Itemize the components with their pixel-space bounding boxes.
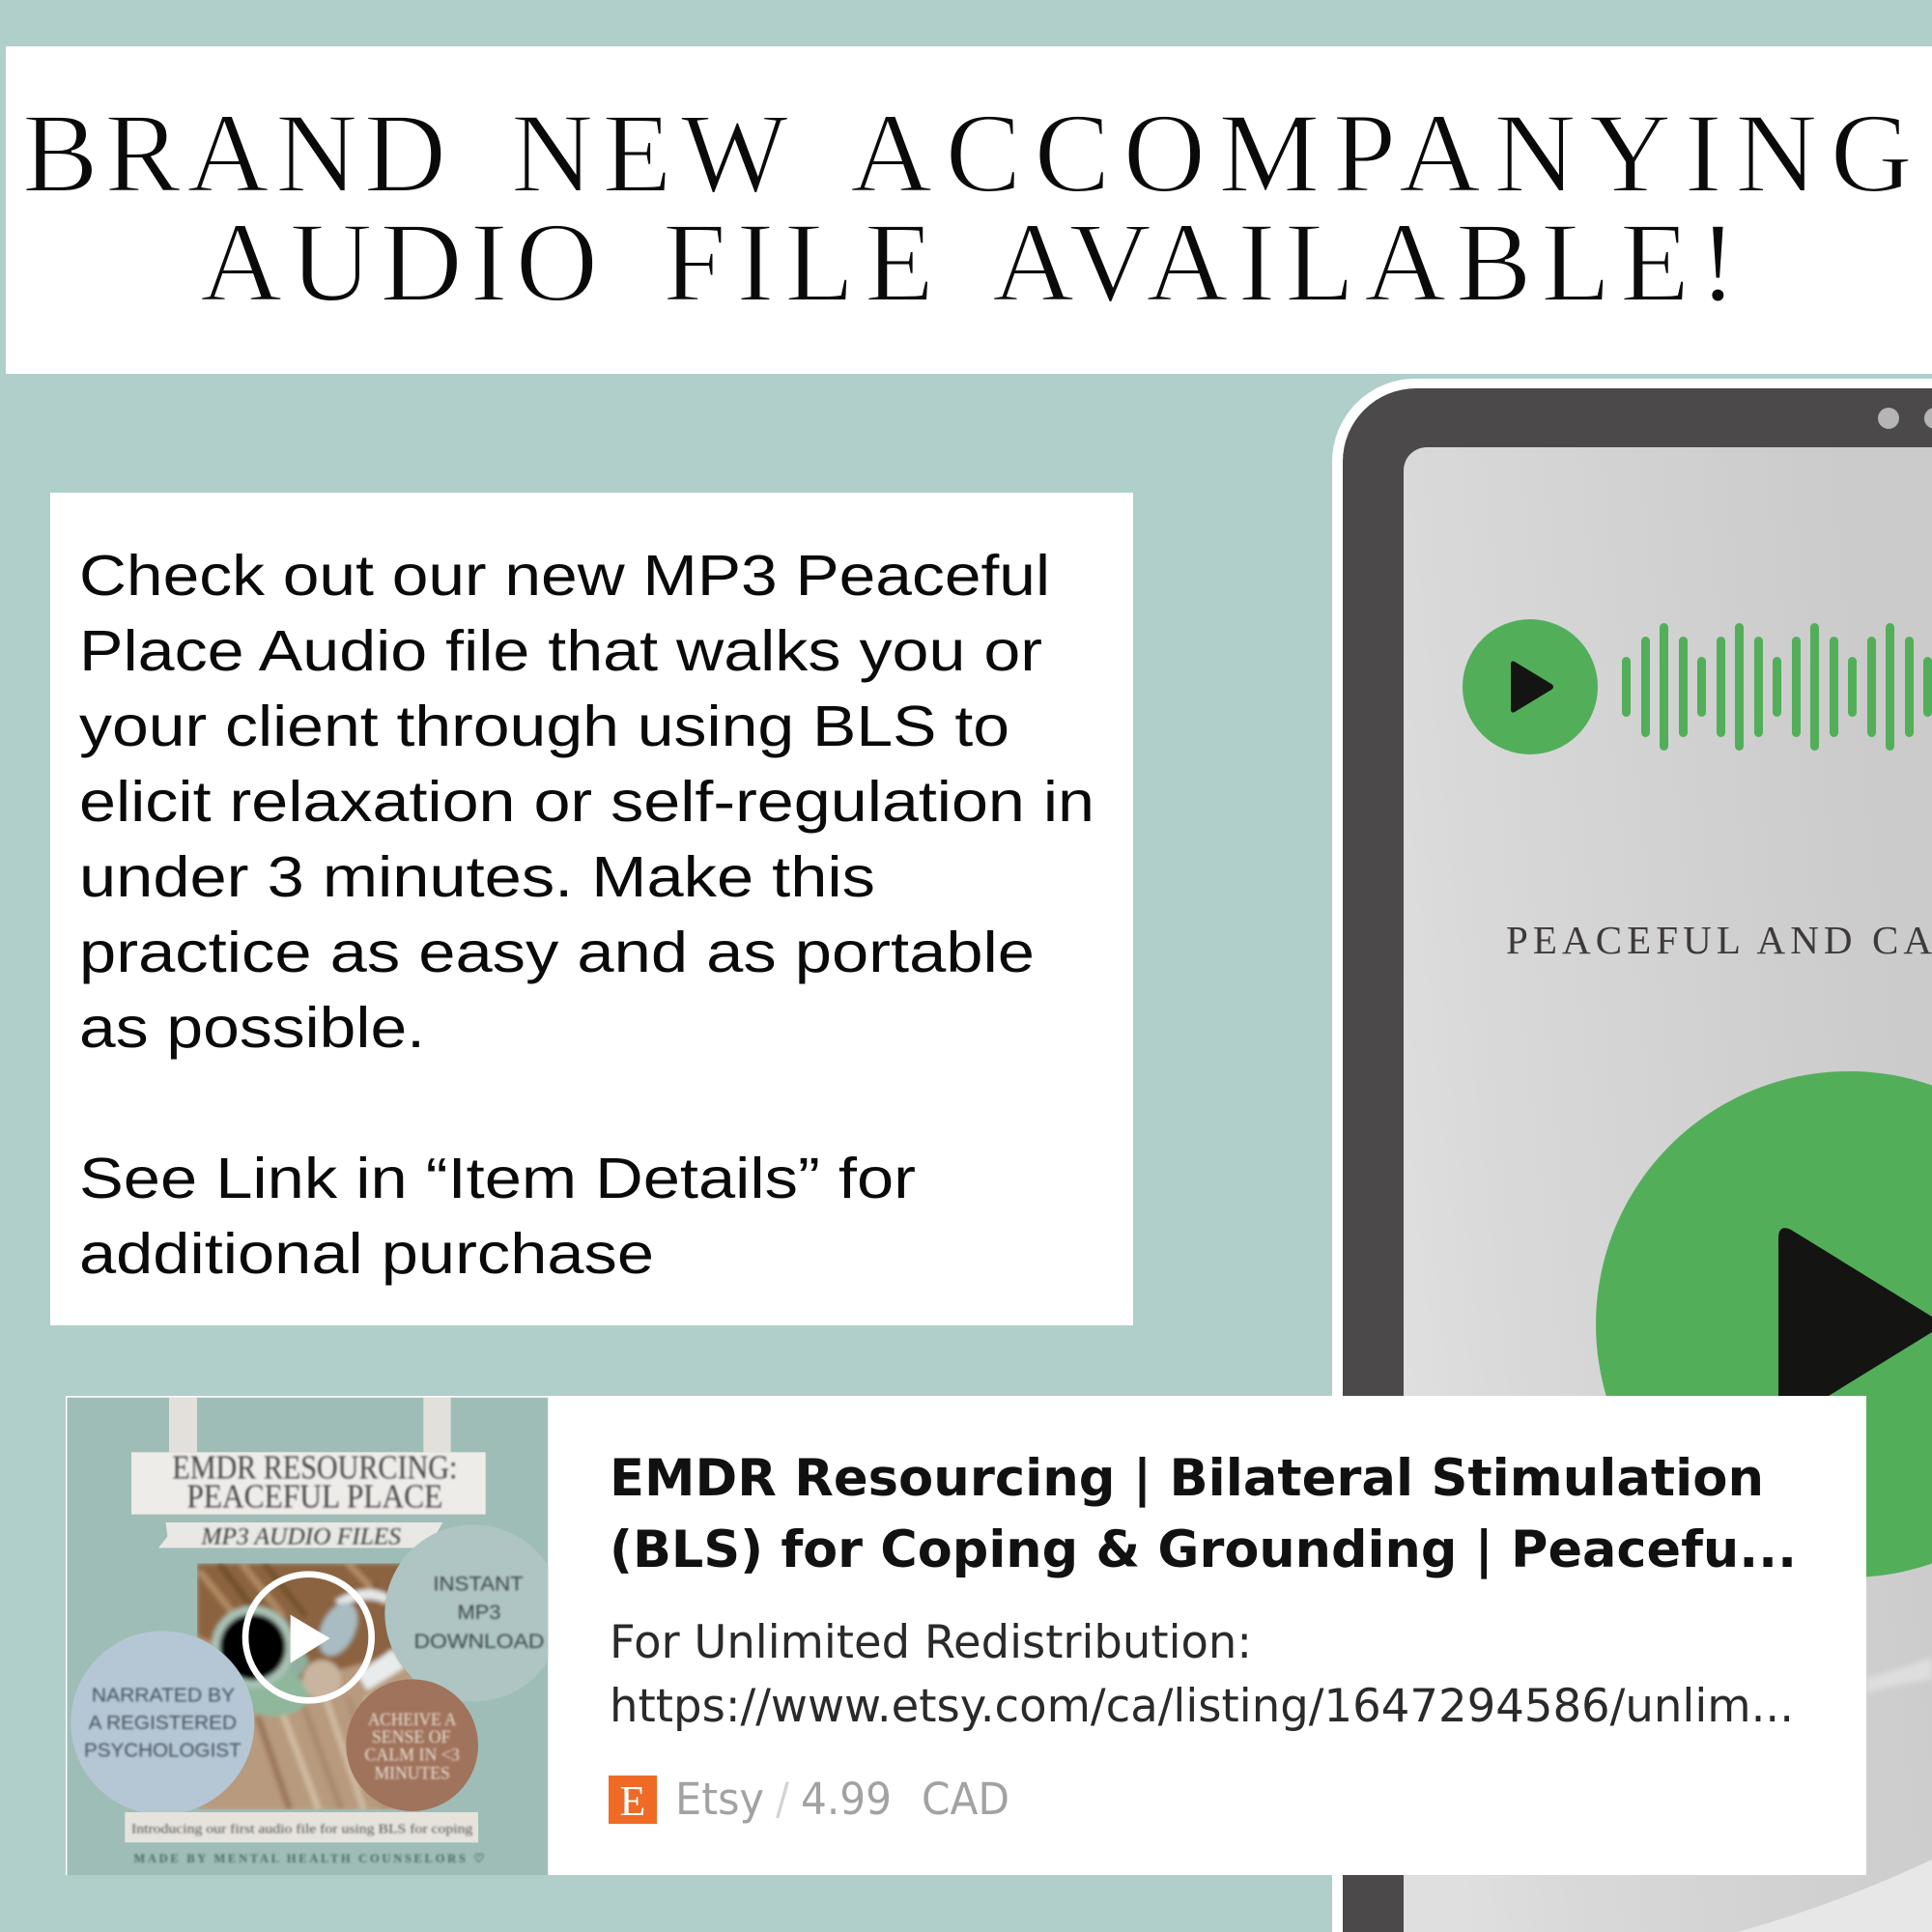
title banner: FILE xyxy=(663,199,934,326)
intro strip: Introducing our first audio file for using BLS for coping xyxy=(131,1822,472,1836)
card description xyxy=(610,1616,1794,1733)
title banner: NEW xyxy=(511,90,789,216)
narrated by badge xyxy=(71,1631,254,1814)
small play button xyxy=(1463,619,1598,754)
audio waveform xyxy=(1622,623,1932,751)
calm badge: CALM IN <3 xyxy=(364,1746,460,1766)
calm badge xyxy=(346,1679,478,1811)
card description: https://www.etsy.com/ca/listing/1647294586/unlim... xyxy=(610,1680,1794,1733)
thumbnail title plate: EMDR RESOURCING: xyxy=(172,1450,457,1487)
description panel: under 3 minutes. Make this xyxy=(79,845,875,909)
title banner: ACCOMPANYING xyxy=(850,90,1913,216)
calm badge: MINUTES xyxy=(374,1763,450,1783)
calm badge: SENSE OF xyxy=(372,1727,451,1747)
instant download badge: MP3 xyxy=(457,1601,500,1624)
source and price: / xyxy=(776,1774,790,1825)
source and price xyxy=(675,1774,1009,1825)
product thumbnail xyxy=(67,1398,562,1875)
audio files ribbon xyxy=(158,1522,442,1550)
audio files ribbon: MP3 AUDIO FILES xyxy=(200,1523,401,1550)
description panel: additional purchase xyxy=(79,1222,654,1286)
etsy icon: E xyxy=(620,1777,645,1825)
thumbnail title plate xyxy=(131,1450,486,1516)
intro strip xyxy=(125,1812,478,1842)
title banner: AUDIO xyxy=(200,199,598,326)
card description: For Unlimited Redistribution: xyxy=(610,1616,1252,1669)
calm badge: ACHEIVE A xyxy=(368,1710,457,1730)
thumbnail play icon xyxy=(245,1575,372,1700)
instant download badge: DOWNLOAD xyxy=(413,1630,544,1653)
title banner xyxy=(6,46,1932,374)
card title: (BLS) for Coping & Grounding | Peacefu... xyxy=(610,1520,1797,1579)
description panel: elicit relaxation or self-regulation in xyxy=(79,770,1094,834)
narrated by badge: PSYCHOLOGIST xyxy=(84,1740,242,1761)
source and price: CAD xyxy=(922,1774,1009,1825)
coffee and headphones photo xyxy=(197,1563,412,1809)
hanging straps xyxy=(169,1398,451,1452)
narrated by badge: A REGISTERED xyxy=(89,1713,237,1734)
large play button xyxy=(1596,1071,1932,1577)
narrated by badge: NARRATED BY xyxy=(92,1686,235,1707)
product link card xyxy=(66,1396,1866,1875)
etsy icon xyxy=(609,1776,657,1825)
instant download badge: INSTANT xyxy=(433,1573,524,1596)
card title xyxy=(610,1449,1797,1579)
tablet caption: PEACEFUL AND CA xyxy=(1506,918,1932,962)
thumbnail title plate: PEACEFUL PLACE xyxy=(186,1479,442,1516)
source and price: Etsy xyxy=(675,1774,764,1825)
source and price: 4.99 xyxy=(801,1774,892,1825)
description panel: Check out our new MP3 Peaceful xyxy=(79,544,1050,608)
description panel: as possible. xyxy=(79,996,425,1060)
description panel: your client through using BLS to xyxy=(79,695,1009,758)
made by line: MADE BY MENTAL HEALTH COUNSELORS ♡ xyxy=(133,1852,485,1865)
description panel: See Link in “Item Details” for xyxy=(79,1147,916,1210)
instant download badge xyxy=(384,1524,562,1702)
tablet mockup xyxy=(1332,379,1932,1932)
card title: EMDR Resourcing | Bilateral Stimulation xyxy=(610,1449,1764,1508)
title banner: BRAND xyxy=(22,90,446,216)
description panel xyxy=(50,493,1133,1325)
title banner: AVAILABLE! xyxy=(992,199,1737,326)
description panel: practice as easy and as portable xyxy=(79,921,1035,984)
description panel: Place Audio file that walks you or xyxy=(79,619,1042,683)
